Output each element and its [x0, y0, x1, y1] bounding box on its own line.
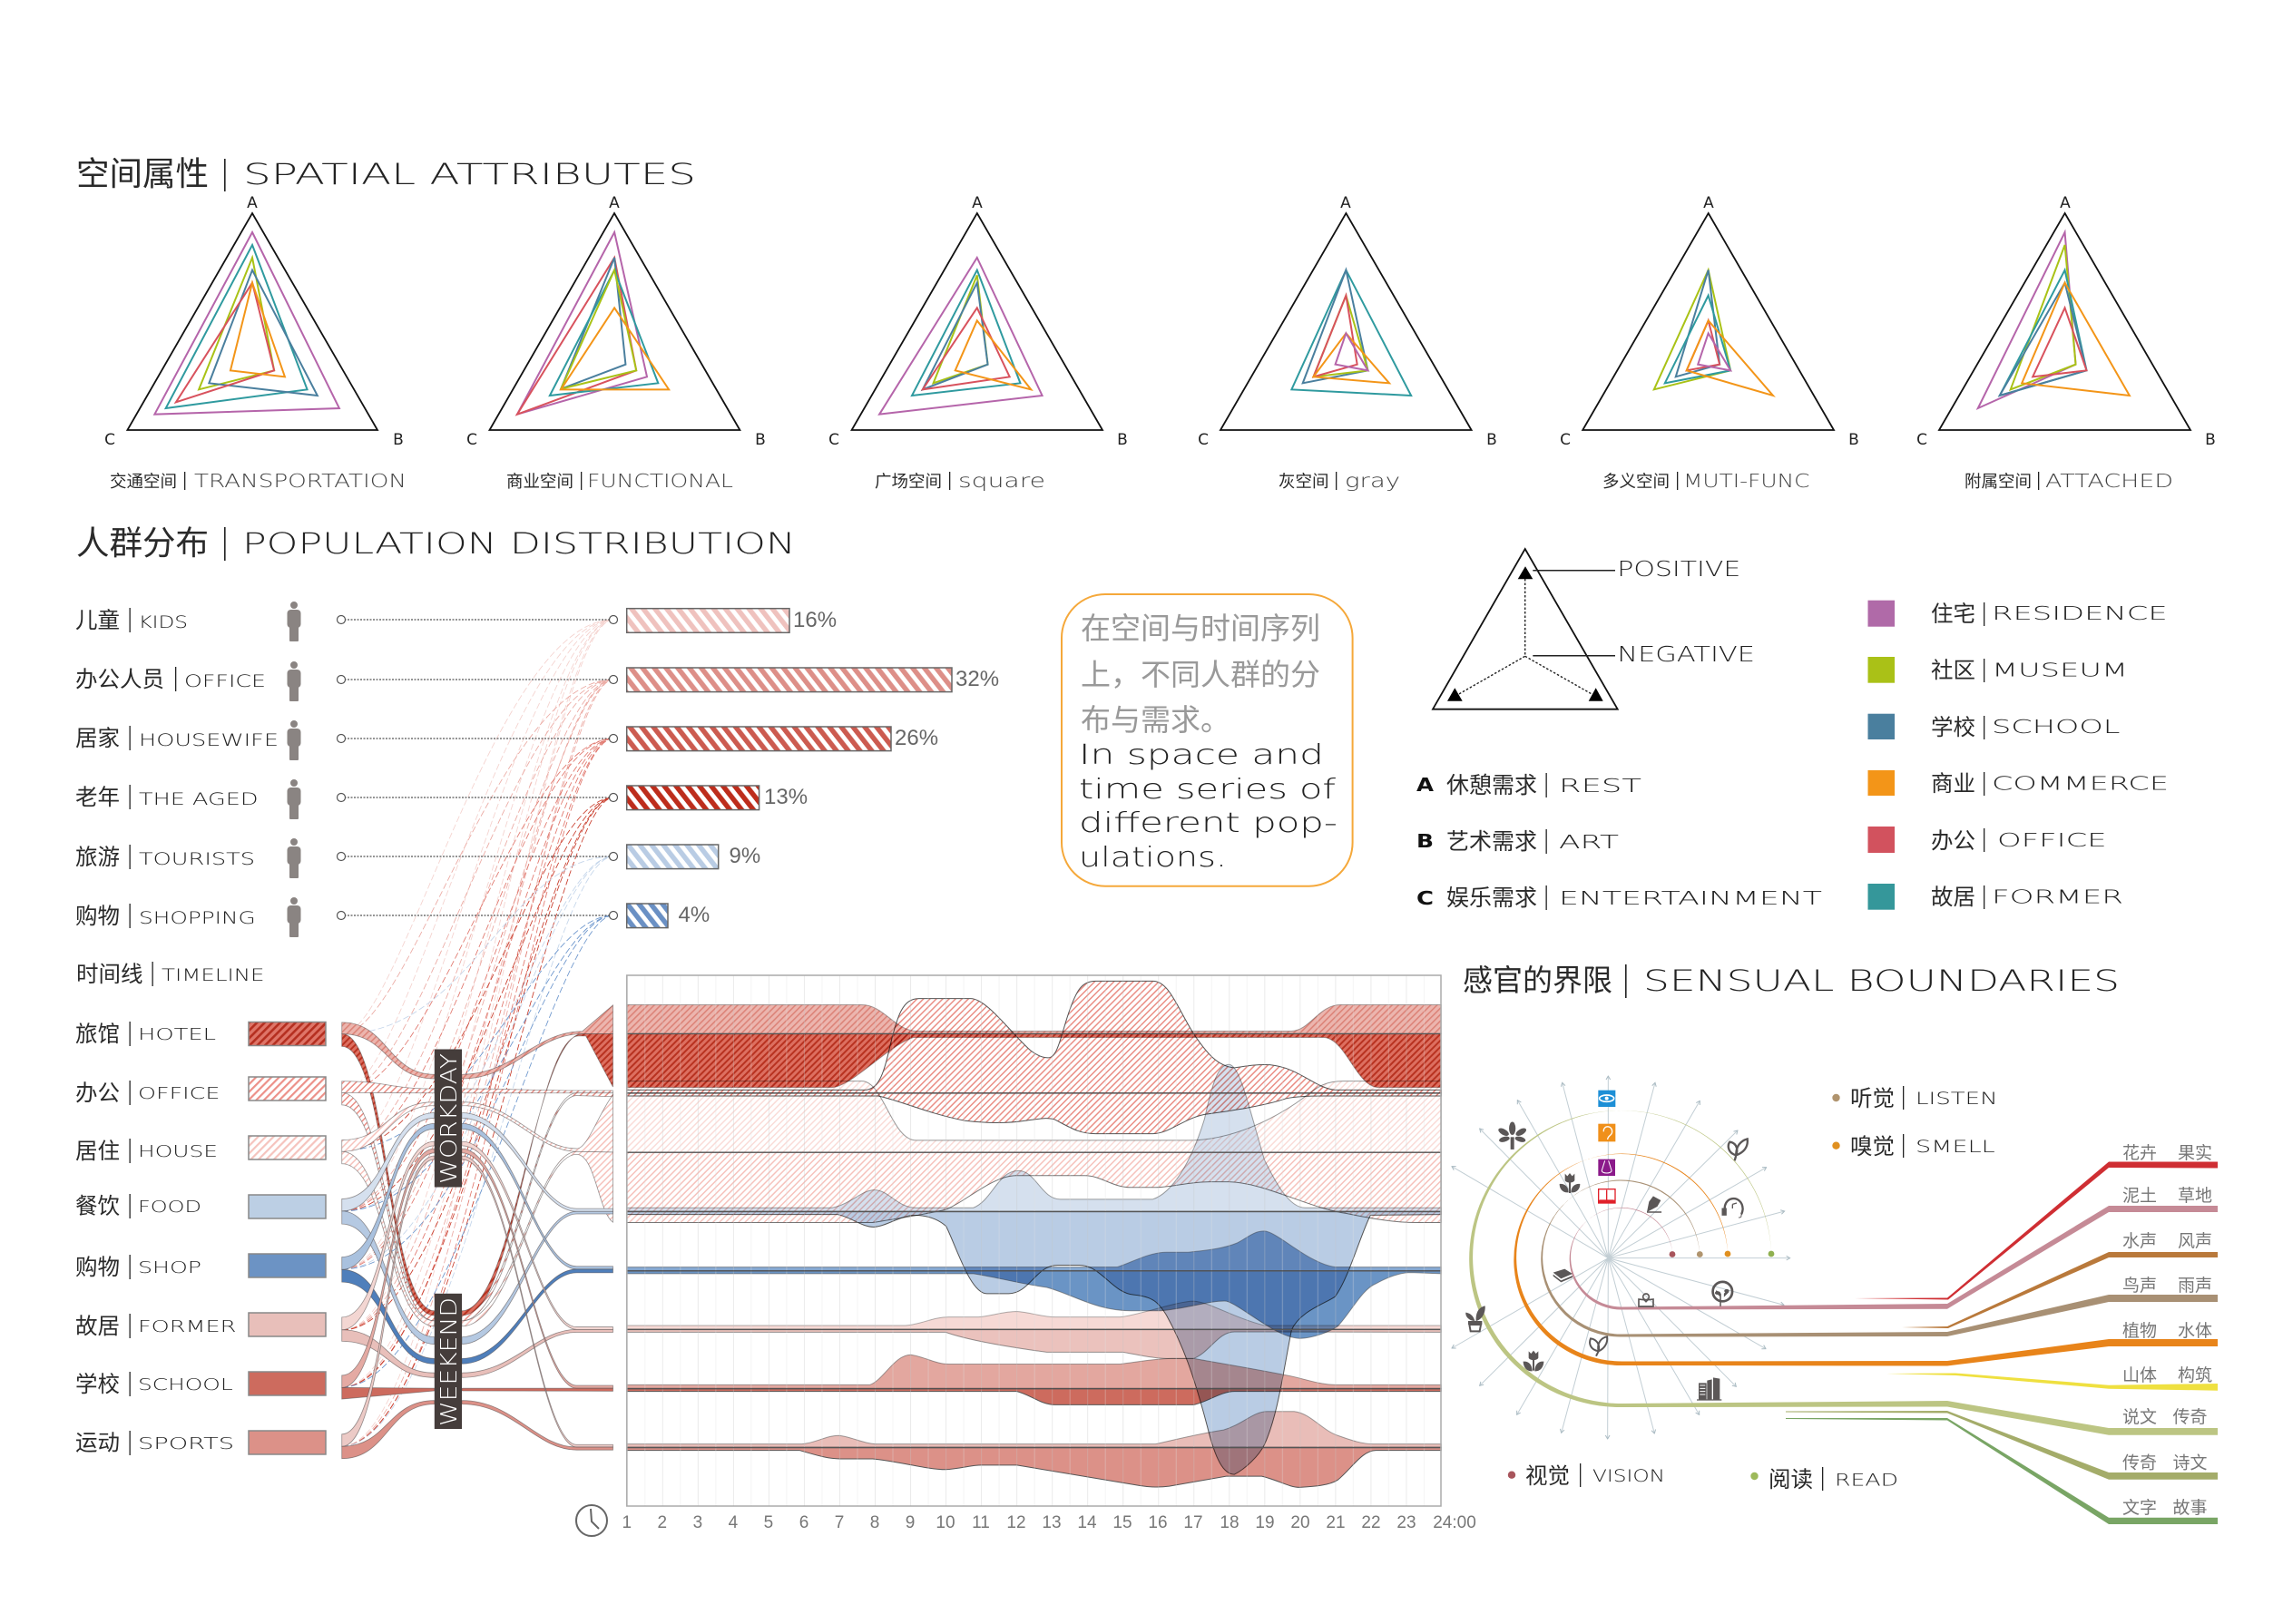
museum: [1867, 657, 2128, 683]
icon: nose: [1598, 1159, 1615, 1176]
caption: 交通空间: [110, 472, 177, 491]
need A: 休憩需求: [1446, 773, 1537, 798]
need A: A: [1416, 774, 1435, 796]
hour axis labels: 12: [1006, 1513, 1026, 1532]
legend: A B C needs: [1416, 773, 1822, 911]
bar: 13%: [627, 786, 759, 810]
callout: space and time note: ulations.: [1079, 842, 1227, 874]
population row: the aged: 13%: [764, 785, 808, 809]
need A: [1416, 773, 1641, 798]
icon: eye: [1598, 1091, 1615, 1107]
population row: the aged: [75, 779, 808, 819]
ribbon end labels: 鸟声: [2122, 1276, 2157, 1296]
residence: RESIDENCE: [1992, 602, 2168, 624]
stream baselines: [627, 1033, 1441, 1448]
heading: population distribution: POPULATION DISTRIBUTION: [242, 526, 796, 561]
heading: timeline: TIMELINE: [162, 965, 265, 985]
need B: 艺术需求: [1446, 829, 1537, 855]
axis labels: A: [609, 194, 620, 212]
axis labels: C: [1560, 431, 1571, 449]
caption: 附属空间: [1965, 472, 2032, 491]
need B: ART: [1559, 831, 1619, 853]
hour axis labels: 4: [729, 1513, 739, 1532]
row: former: [75, 1313, 326, 1339]
icon: tree: [1497, 1122, 1527, 1150]
hour axis labels: 18: [1220, 1513, 1239, 1532]
legend: read: [1750, 1467, 1898, 1492]
population row: shopping: 4%: [679, 903, 710, 927]
heading: sensual boundaries: [1463, 964, 2120, 998]
icon: round tree: [1713, 1282, 1732, 1306]
population row: tourists: [75, 838, 760, 878]
dashed flow curves to population groups: [342, 620, 613, 1446]
hour axis labels: 2: [658, 1513, 667, 1532]
hour axis labels: 24:00: [1433, 1513, 1476, 1532]
heading: timeline: [76, 962, 265, 987]
axis labels: [828, 194, 1128, 449]
hour axis labels: 6: [799, 1513, 808, 1532]
need A: REST: [1559, 775, 1641, 797]
legend: smell: 嗅觉: [1850, 1134, 1895, 1159]
row: school: [75, 1372, 326, 1397]
caption: FUNCTIONAL: [587, 470, 733, 492]
row: sports: SPORTS: [138, 1434, 234, 1453]
need C: C: [1416, 887, 1434, 909]
shop streams: [627, 1231, 1441, 1338]
ribbon end labels: 风声: [2178, 1231, 2212, 1251]
heading: spatial attributes: SPATIAL ATTRIBUTES: [243, 157, 696, 191]
heading: population distribution: [76, 524, 796, 562]
stream areas: [627, 981, 1441, 1487]
legend: space users: [1867, 601, 2169, 910]
block: weekend: WEEKEND: [436, 1297, 462, 1426]
icon: headphones: [1723, 1198, 1743, 1218]
caption: gray: [1345, 470, 1400, 492]
heading: spatial attributes: [76, 155, 696, 192]
caption: [1965, 470, 2173, 492]
hour axis labels: 8: [870, 1513, 879, 1532]
ribbon end labels: 传奇: [2122, 1453, 2157, 1473]
row: food: [75, 1194, 326, 1219]
row: house: 居住: [75, 1139, 120, 1164]
bar: 32%: [627, 668, 952, 692]
commerce: 商业: [1931, 771, 1975, 797]
axis labels: A: [972, 194, 983, 212]
icon: ear: [1598, 1124, 1615, 1141]
population row: shopping: 购物: [75, 904, 120, 929]
icon: person: [287, 779, 301, 819]
gray icons: [1465, 1122, 1748, 1401]
axis labels: C: [1198, 431, 1209, 449]
row: hotel: [75, 1022, 326, 1047]
sense icons and nature icons: [1465, 1091, 1748, 1401]
ribbon end labels: 泥土: [2122, 1186, 2157, 1206]
row: office: 办公: [75, 1081, 120, 1106]
radar triangle: functional: [466, 194, 766, 492]
ribbon end labels: 传奇: [2172, 1407, 2208, 1427]
population row: tourists: TOURISTS: [139, 849, 255, 869]
caption: [1602, 470, 1809, 492]
legend: smell: [1832, 1134, 1995, 1159]
callout: space and time note: 在空间与时间序列: [1081, 611, 1320, 645]
axis labels: [104, 194, 404, 449]
school: 学校: [1931, 715, 1975, 740]
icon: leaves: [1729, 1139, 1748, 1160]
row: house: HOUSE: [138, 1142, 218, 1161]
legend: vision: 视觉: [1525, 1463, 1570, 1489]
legend: positive and negative triangle: POSITIVE: [1617, 558, 1740, 582]
former: [1867, 884, 2123, 910]
office: 办公: [1931, 828, 1975, 854]
commerce: [1867, 770, 2169, 797]
row: shop: 购物: [75, 1255, 120, 1280]
hour axis labels: [622, 1513, 1476, 1532]
caption: square: [958, 470, 1045, 492]
icon: person: [287, 897, 301, 937]
population row: kids: 16%: [793, 608, 837, 632]
caption: [875, 470, 1045, 492]
ribbon: listen: [1541, 1179, 2218, 1337]
icon: buildings: [1697, 1377, 1721, 1401]
caption: MUTI-FUNC: [1683, 470, 1809, 492]
bar: 4%: [627, 904, 668, 928]
hour axis labels: 19: [1255, 1513, 1275, 1532]
icon: books: [1553, 1269, 1573, 1282]
callout: space and time note: 布与需求。: [1081, 703, 1230, 737]
residence: 住宅: [1931, 602, 1975, 627]
legend: positive and negative triangle: NEGATIVE: [1617, 643, 1755, 667]
radar triangle: transportation: [104, 194, 407, 492]
thin brown ribbon: [1902, 1252, 2218, 1328]
museum: MUSEUM: [1992, 659, 2128, 680]
row: school: SCHOOL: [138, 1375, 233, 1394]
population row: housewife: 26%: [895, 726, 938, 750]
need C: ENTERTAINMENT: [1559, 887, 1822, 909]
icon: pot plant: [1465, 1306, 1485, 1331]
need B: B: [1416, 830, 1434, 852]
timeline category labels: [75, 1022, 326, 1455]
icon: person: [287, 838, 301, 878]
population row: kids: 儿童: [75, 608, 120, 633]
caption: TRANSPORTATION: [194, 470, 407, 492]
ribbon: smell: [1514, 1154, 2218, 1391]
ribbon end labels: 水体: [2178, 1321, 2212, 1341]
axis labels: A: [247, 194, 258, 212]
legend: vision: VISION: [1592, 1466, 1665, 1486]
ribbon end labels: 山体: [2122, 1365, 2157, 1385]
thin red ribbon: [1855, 1161, 2218, 1299]
hour axis labels: 14: [1077, 1513, 1097, 1532]
axis labels: [466, 194, 766, 449]
callout: space and time note: [1062, 594, 1353, 886]
icon: reading book: [1639, 1294, 1653, 1306]
ribbon end labels: 草地: [2178, 1186, 2212, 1206]
food streams: [627, 1064, 1441, 1474]
population row: shopping: [75, 897, 710, 937]
ribbon end labels: 说文: [2122, 1407, 2157, 1427]
commerce: COMMERCE: [1992, 773, 2169, 795]
ribbon end labels: 花卉: [2122, 1143, 2157, 1163]
hour axis labels: 22: [1361, 1513, 1381, 1532]
caption: [1279, 470, 1400, 492]
axis labels: [1560, 194, 1859, 449]
row: sports: [75, 1431, 326, 1455]
bar: 9%: [627, 845, 719, 869]
ribbon end labels: 雨声: [2178, 1276, 2212, 1296]
ribbon end labels: 文字: [2122, 1498, 2157, 1518]
row: shop: [75, 1254, 326, 1280]
sports streams: [627, 1412, 1441, 1487]
axis labels: A: [1340, 194, 1351, 212]
school: [1867, 714, 2120, 740]
hour axis labels: 9: [906, 1513, 915, 1532]
icon: flower: [1560, 1173, 1580, 1193]
ribbon end labels: 诗文: [2172, 1453, 2208, 1473]
hour axis labels: 1: [622, 1513, 632, 1532]
sankey: categories to workday and weekend: [342, 1005, 613, 1459]
axis labels: B: [2205, 431, 2216, 449]
callout: space and time note: 上，不同人群的分: [1081, 658, 1320, 691]
caption: [110, 470, 407, 492]
hour axis labels: 13: [1042, 1513, 1062, 1532]
axis labels: B: [1117, 431, 1128, 449]
hour axis labels: 7: [835, 1513, 844, 1532]
axis labels: [1198, 194, 1497, 449]
hotel streams: [627, 1005, 1441, 1088]
row: shop: SHOP: [138, 1258, 201, 1277]
population row: the aged: 老年: [75, 785, 120, 810]
legend: listen: 听觉: [1850, 1086, 1895, 1111]
callout: space and time note: different pop-: [1079, 807, 1337, 839]
heading: sensual boundaries: 感官的界限: [1463, 964, 1612, 997]
population row: office: [75, 661, 999, 701]
ribbon end labels: 果实: [2178, 1143, 2212, 1163]
radar triangle: multi-function: [1560, 194, 1859, 492]
icon: person: [287, 661, 301, 701]
population row: housewife: HOUSEWIFE: [139, 730, 279, 750]
heading: timeline: 时间线: [76, 962, 143, 987]
legend: read: READ: [1835, 1470, 1898, 1490]
callout: space and time note: In space and: [1079, 739, 1324, 771]
row: school: 学校: [75, 1372, 120, 1397]
axis labels: B: [1848, 431, 1859, 449]
radar triangle: gray: [1198, 194, 1497, 492]
ribbon end labels: 水声: [2122, 1231, 2157, 1251]
population row: office: 办公人员: [75, 667, 164, 692]
caption: 商业空间: [506, 472, 573, 491]
row: food: FOOD: [138, 1198, 201, 1217]
caption: ATTACHED: [2045, 470, 2173, 492]
row: office: [75, 1077, 326, 1106]
population row: office: 32%: [955, 667, 999, 691]
legend: listen: LISTEN: [1916, 1089, 1998, 1109]
icon: clock: [576, 1505, 607, 1536]
heading: sensual boundaries: SENSUAL BOUNDARIES: [1643, 964, 2120, 998]
caption: [506, 470, 733, 492]
axis labels: C: [1916, 431, 1927, 449]
ribbon end labels: 构筑: [2178, 1365, 2212, 1385]
former streams: [627, 1301, 1441, 1358]
office: OFFICE: [1997, 829, 2107, 851]
axis labels: C: [828, 431, 839, 449]
hour axis labels: 10: [936, 1513, 955, 1532]
axis labels: [1916, 194, 2216, 449]
hour axis labels: 20: [1290, 1513, 1310, 1532]
axis labels: C: [104, 431, 115, 449]
office: [1867, 827, 2107, 854]
icon: small leaves: [1590, 1336, 1607, 1356]
hour axis labels: 5: [764, 1513, 773, 1532]
caption: 广场空间: [875, 472, 942, 491]
need C: [1416, 885, 1822, 911]
former: FORMER: [1992, 885, 2123, 907]
school streams: [627, 1355, 1441, 1404]
axis labels: A: [2060, 194, 2071, 212]
row: hotel: HOTEL: [138, 1025, 216, 1044]
hour axis labels: 16: [1148, 1513, 1168, 1532]
icon: person: [287, 602, 301, 641]
radar triangle: square: [828, 194, 1128, 492]
row: house: [75, 1136, 326, 1164]
radial rays: [1452, 1076, 1790, 1439]
population row: office: OFFICE: [184, 671, 266, 691]
legend: listen: [1832, 1086, 1998, 1111]
row: food: 餐饮: [75, 1194, 120, 1219]
ribbon end labels: [2122, 1143, 2212, 1518]
hour axis labels: 11: [972, 1513, 990, 1532]
population row: shopping: SHOPPING: [139, 908, 256, 928]
row: former: 故居: [75, 1314, 120, 1339]
population row: housewife: [75, 720, 938, 760]
house streams: [627, 1081, 1441, 1223]
icon: flower lower: [1524, 1351, 1543, 1371]
former: 故居: [1931, 885, 1975, 910]
population row: housewife: 居家: [75, 726, 120, 751]
need C: 娱乐需求: [1446, 885, 1537, 911]
ribbon end labels: 故事: [2172, 1498, 2208, 1518]
bar: 26%: [627, 727, 891, 751]
block: workday: WORKDAY: [436, 1053, 462, 1184]
ribbon end labels: 植物: [2122, 1321, 2157, 1341]
row: sports: 运动: [75, 1432, 120, 1455]
row: hotel: 旅馆: [75, 1022, 120, 1047]
hour axis labels: 21: [1326, 1513, 1346, 1532]
residence: [1867, 601, 2168, 627]
ribbon: vision: [1570, 1161, 2218, 1310]
population row: the aged: THE AGED: [139, 789, 258, 809]
hour axis labels: 3: [693, 1513, 702, 1532]
hour axis labels: 15: [1112, 1513, 1132, 1532]
office streams: [627, 981, 1441, 1134]
legend: smell: SMELL: [1916, 1137, 1995, 1157]
green ribbon: [1786, 1418, 2218, 1524]
thin yellow ribbon: [1886, 1374, 2218, 1391]
row: office: OFFICE: [138, 1084, 220, 1103]
bar: 16%: [627, 609, 789, 632]
arc end dots: [1670, 1251, 1774, 1257]
icon: arrowheads: [1447, 566, 1603, 701]
need B: [1416, 829, 1619, 855]
row: former: FORMER: [138, 1317, 236, 1336]
axis labels: B: [1486, 431, 1497, 449]
axis labels: B: [755, 431, 766, 449]
museum: 社区: [1931, 658, 1975, 683]
population row: kids: [75, 602, 837, 641]
icon: person: [287, 720, 301, 760]
icon: book: [1599, 1189, 1615, 1203]
heading: spatial attributes: 空间属性: [76, 155, 209, 192]
timeline chart: [576, 975, 1476, 1536]
population row: tourists: 9%: [730, 844, 760, 868]
axis labels: B: [393, 431, 404, 449]
radar triangle: attached: [1916, 194, 2216, 492]
callout: space and time note: time series of: [1079, 774, 1337, 806]
caption: 多义空间: [1602, 472, 1670, 491]
hour axis labels: 17: [1183, 1513, 1203, 1532]
caption: 灰空间: [1279, 472, 1329, 491]
axis labels: C: [466, 431, 477, 449]
ribbon: read: [1469, 1110, 2218, 1524]
population row: kids: KIDS: [138, 612, 188, 632]
axis labels: A: [1703, 194, 1714, 212]
hour axis labels: 23: [1396, 1513, 1416, 1532]
icon: pen: [1647, 1196, 1661, 1212]
legend: read: 阅读: [1769, 1467, 1813, 1492]
legend: positive and negative triangle: [1433, 549, 1755, 709]
population row: tourists: 旅游: [75, 845, 120, 870]
olive ribbon: [1786, 1411, 2218, 1480]
legend: vision: [1508, 1463, 1665, 1489]
school: SCHOOL: [1992, 716, 2120, 738]
heading: population distribution: 人群分布: [76, 524, 209, 562]
